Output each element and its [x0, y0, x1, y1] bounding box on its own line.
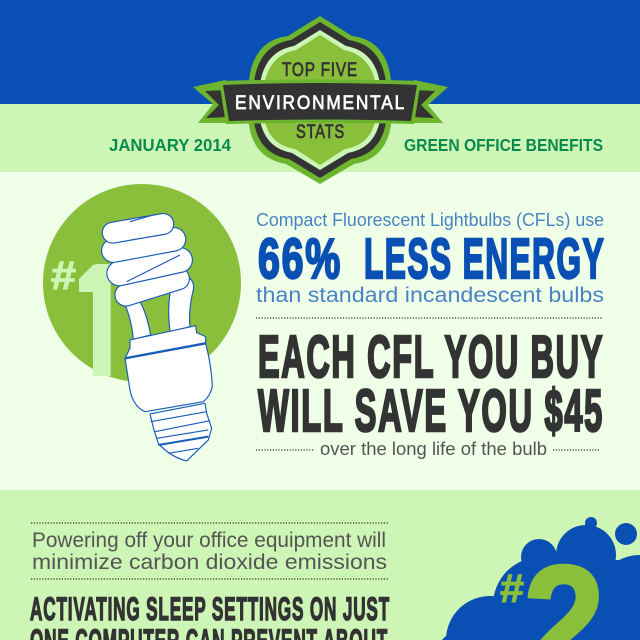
- panel: stat 1 background: [0, 172, 640, 490]
- ribbon green outline: [219, 80, 421, 124]
- badge pale inner line: [260, 30, 380, 170]
- bulb screw thread: [150, 403, 212, 461]
- cloud large puff: [556, 525, 616, 560]
- stat 2 hash mark: #: [500, 567, 524, 611]
- stat 1 follow-up line: than standard incandescent bulbs: [256, 284, 604, 307]
- bulb collar: [125, 326, 206, 358]
- icon: blue CO2 cloud: [438, 517, 640, 640]
- note dots right: [553, 449, 600, 451]
- ribbon dark band: [223, 83, 417, 121]
- bulb right tube: [169, 277, 194, 332]
- header blue band: [0, 0, 640, 104]
- stat 1 numeral: 1: [57, 222, 135, 445]
- stat 1 hash mark: #: [51, 254, 76, 298]
- cloud edge puff: [442, 636, 446, 640]
- bulb thread lines: [125, 215, 210, 453]
- badge text: environmental: ENVIRONMENTAL: [235, 93, 406, 114]
- date label: JANUARY 2014: [109, 135, 231, 155]
- bulb top coil: [113, 224, 163, 233]
- stat 2 intro line 2: minimize carbon dioxide emissions: [32, 551, 387, 574]
- ribbon right tail: [399, 80, 448, 123]
- stat 1 intro line: Compact Fluorescent Lightbulbs (CFLs) use: [256, 210, 604, 230]
- stat 2 intro line 1: Powering off your office equipment will: [32, 529, 386, 552]
- ribbon left tail dark: [205, 90, 228, 118]
- dotted rule top: [31, 522, 389, 524]
- bulb base: [125, 343, 212, 412]
- stat 1 green circle: [43, 184, 241, 382]
- bulb lowest coil: [126, 279, 178, 295]
- floating bubble: [615, 523, 637, 545]
- dotted divider: [256, 317, 603, 319]
- ribbon left tail: [193, 80, 241, 123]
- dotted rule bottom: [31, 578, 389, 580]
- ribbon right tail dark: [412, 90, 435, 118]
- badge outer green shape: [249, 16, 391, 184]
- cloud top knob: [585, 517, 597, 527]
- cloud left puff: [494, 561, 530, 622]
- badge green centre: [264, 35, 376, 165]
- cloud right puff: [619, 555, 640, 560]
- panel: stat 2 background: [0, 490, 640, 640]
- cloud small puff: [521, 539, 556, 562]
- bulb second coil: [113, 239, 174, 251]
- badge dark border: [254, 22, 386, 178]
- cloud body fill: [574, 560, 619, 640]
- bulb left tube: [125, 301, 151, 339]
- stat 1 figure: 66%: [258, 227, 342, 291]
- note dots left: [256, 449, 314, 451]
- bulb third coil: [119, 260, 180, 273]
- badge: top five environmental stats: [193, 16, 448, 184]
- header green band: [0, 104, 640, 172]
- cloud lower puff: [446, 596, 508, 640]
- badge text: top five: TOP FIVE: [282, 60, 358, 81]
- icon: CFL bulb: [113, 215, 212, 461]
- badge text: stats: STATS: [296, 122, 345, 143]
- topic label: GREEN OFFICE BENEFITS: [404, 135, 603, 155]
- savings note: over the long life of the bulb: [320, 439, 547, 459]
